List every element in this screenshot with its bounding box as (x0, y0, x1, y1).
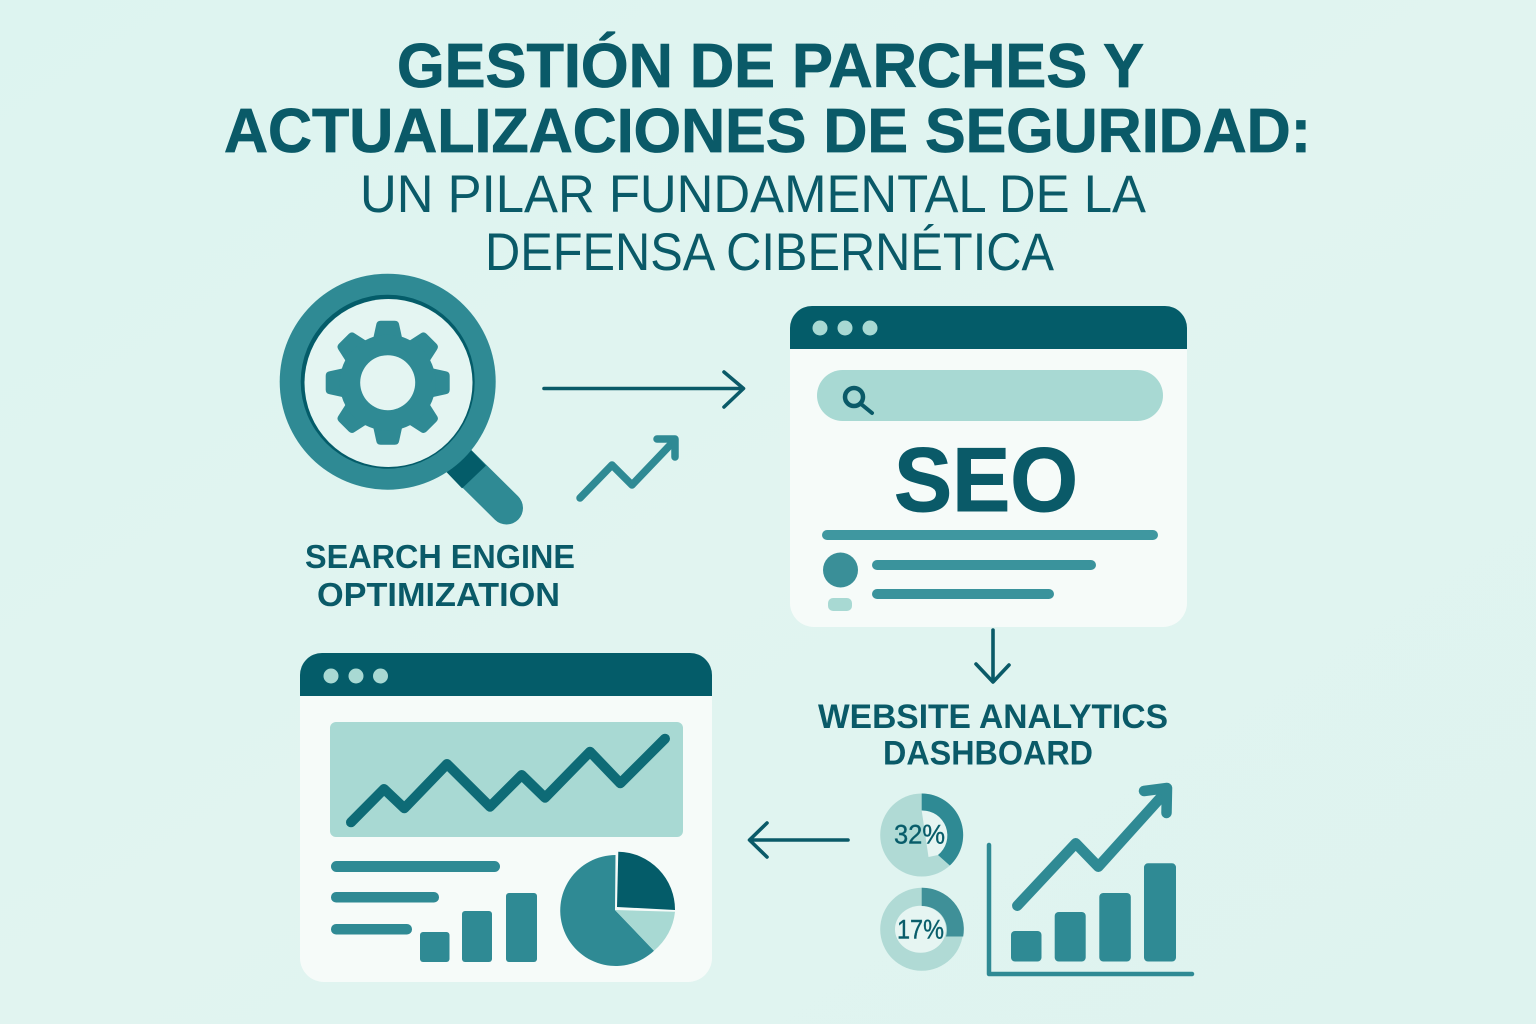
label: search engine optimization: OPTIMIZATION (317, 576, 560, 613)
chart: 17% donut: 17% (897, 914, 944, 944)
title: UN PILAR FUNDAMENTAL DE LA (360, 165, 1147, 224)
result lines (822, 530, 1158, 611)
icon: gear (326, 321, 450, 445)
arrow: analytics to dashboard (750, 823, 848, 857)
text lines (331, 861, 500, 934)
icon: magnifying glass with gear (280, 274, 506, 508)
label: search engine optimization: SEARCH ENGINE (305, 538, 575, 575)
title (224, 32, 1311, 282)
pie chart (560, 852, 675, 966)
icon: small trend arrow (580, 439, 675, 498)
label: website analytics dashboard: WEBSITE ANALYTICS (818, 698, 1168, 736)
SEO heading: SEO (894, 430, 1078, 531)
small bar chart (420, 893, 537, 962)
arrow: magnifier to SEO window (544, 372, 744, 407)
search bar (817, 370, 1163, 421)
panel: dashboard browser window (300, 653, 712, 982)
title: DEFENSA CIBERNÉTICA (485, 223, 1055, 282)
trend arrow (1017, 788, 1167, 906)
title: ACTUALIZACIONES DE SEGURIDAD: (224, 97, 1311, 166)
panel: SEO browser window (790, 306, 1187, 627)
chart: 32% donut: 32% (894, 820, 945, 850)
axes (989, 845, 1192, 974)
chart: 32% donut (880, 794, 963, 876)
title: GESTIÓN DE PARCHES Y (397, 32, 1144, 101)
chart: 17% donut (880, 888, 964, 971)
line chart (330, 722, 683, 837)
arrow: SEO window to analytics (976, 630, 1009, 682)
label: website analytics dashboard: DASHBOARD (883, 734, 1093, 772)
chart: growth bars with arrow (989, 788, 1192, 974)
label: search engine optimization (305, 538, 575, 613)
bars (1011, 863, 1176, 962)
label: website analytics dashboard (818, 698, 1168, 772)
